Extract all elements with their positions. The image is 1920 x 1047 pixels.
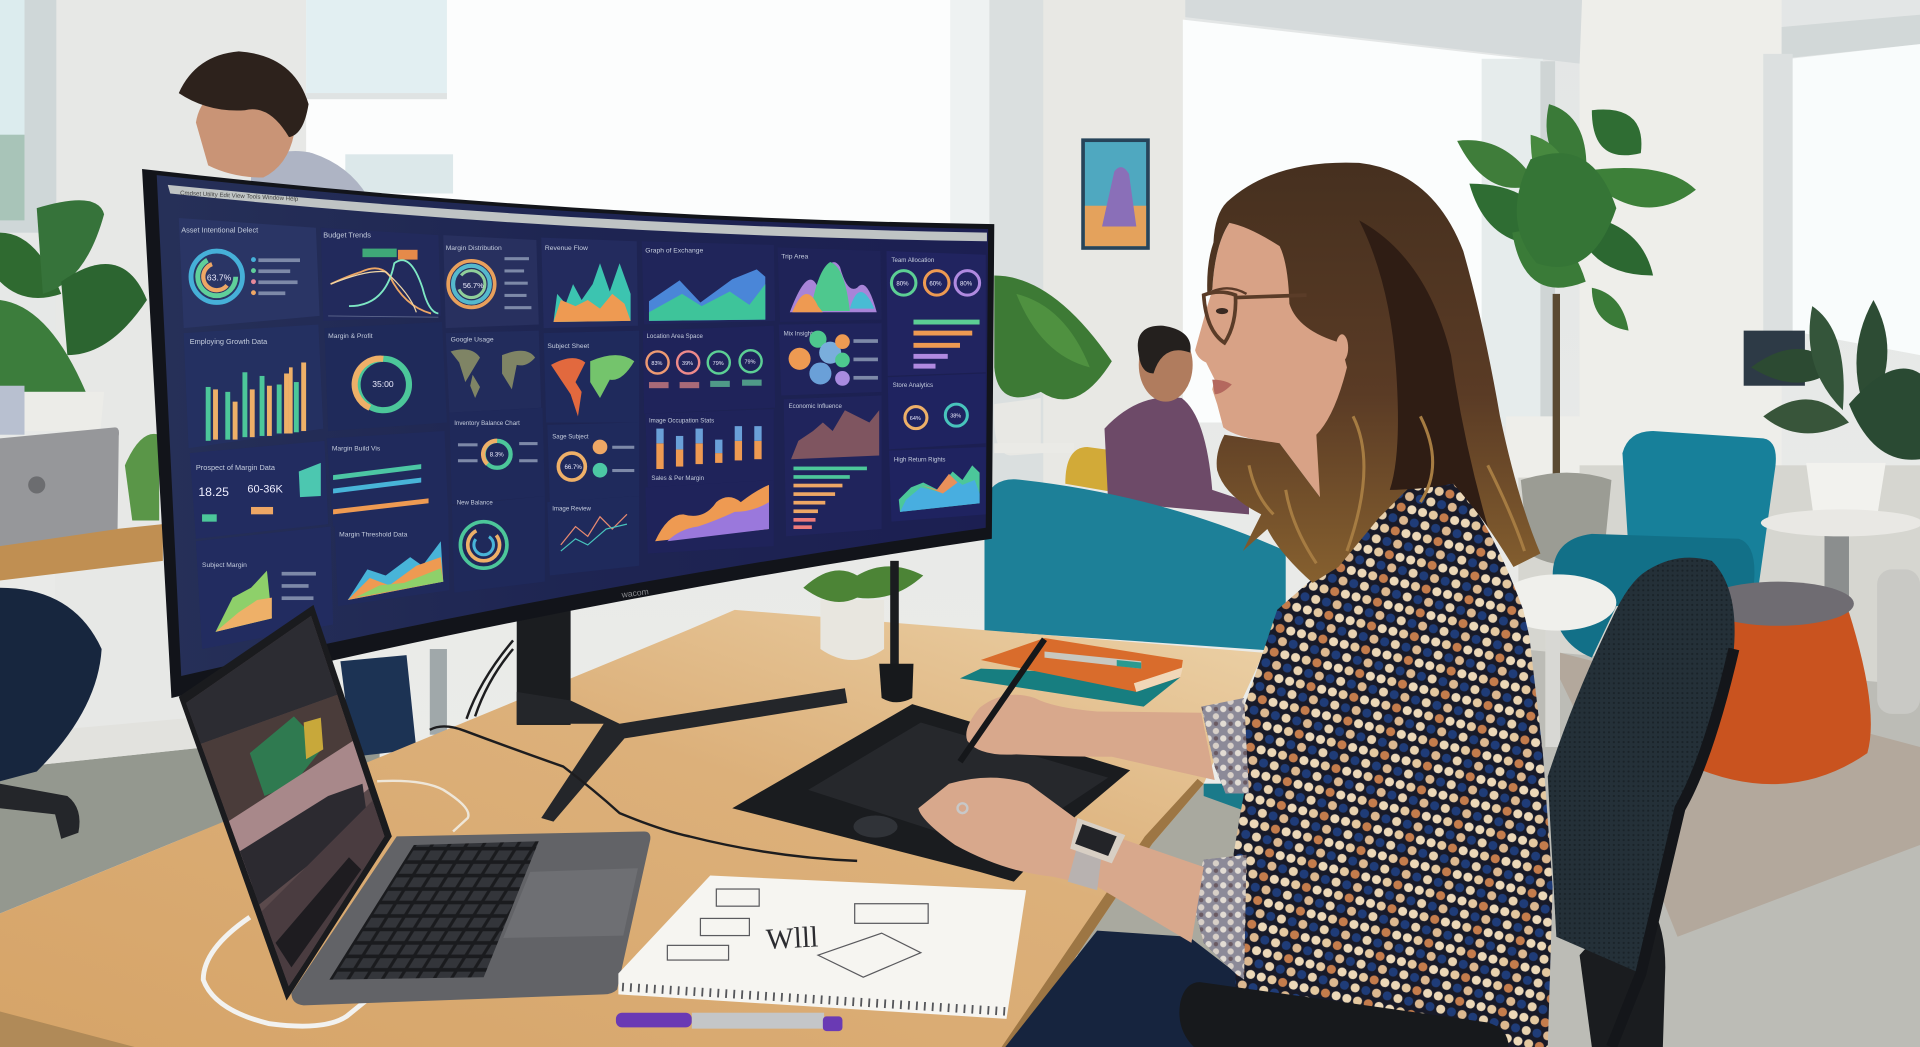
panel: ring distribution: Margin Distribution [446,245,502,252]
colleague head [196,88,294,178]
panel: concentric rings: New Balance [457,500,493,507]
support pole [430,649,447,735]
panel: small line chart: Image Review [552,506,592,513]
panel: rings and progress bars: 80% [896,280,909,287]
panel: four rings: Location Area Space [647,333,704,340]
menu bar: Cmdset Utility Edit View Tools Window Help [180,190,299,203]
ultrawide curved monitor [142,169,994,698]
panel: stat tiles: Prospect of Margin Data [196,463,276,472]
round side table [1761,509,1920,714]
far right window [1763,15,1920,355]
panel: horizontal bars: Margin Build Vis [332,446,381,453]
panel: rings and progress bars [887,251,986,376]
panel: wave area: Sales & Per Margin [651,475,704,482]
ear [1336,334,1348,361]
wall artwork [1081,138,1150,250]
panel: big stats area [196,527,333,649]
panel: donut overview [179,218,320,328]
sketch notebook [618,876,1026,1019]
panel: bar chart: Employing Growth Data [190,337,268,346]
round white coffee table [1499,574,1616,747]
panel: stacked bars: Image Occupation Stats [649,417,714,424]
background desk with laptop [0,386,163,580]
panel: stat tiles: 18.25 [198,485,229,499]
panel: concentric rings [452,496,545,593]
panel: two rings: 64% [910,416,921,422]
chair frame [1580,891,1665,1047]
panel: large donut: Margin & Profit [328,333,373,340]
upper sleeve cuff [1201,698,1249,794]
panel: four rings: 79% [744,360,756,366]
monitor screen [157,175,988,676]
monitor bezel [142,169,994,698]
office chair [1548,558,1735,1047]
lower sleeve cuff [1191,855,1247,980]
panel: small line chart [547,496,639,576]
right window [1183,0,1582,478]
panel: colorful area [889,447,986,522]
panel: stat tiles [190,441,328,539]
monitor brand logo: wacom [620,586,649,600]
colleague legs [340,655,416,757]
panel: blue green area chart: Graph of Exchange [645,247,703,254]
laptop screen [184,610,389,989]
panel: small donut tiles: Inventory Balance Chart [454,420,520,427]
graphics tablet [732,704,1130,882]
panel: brown area plus bars [784,396,882,536]
monitor stand [517,610,847,822]
panel: teal orange area chart [541,238,638,328]
wall side table and laptop in back [1744,331,1849,637]
stylus holder [879,561,913,702]
panel: flower diagram: Mix Insight [784,331,813,338]
plant: dark rubber plant [1751,300,1920,529]
floor and rug [0,649,1920,1047]
panel: brown area plus bars: Economic Influence [789,403,842,410]
colleague torso [251,151,367,196]
wooden desk [0,610,1264,1047]
panel: colorful area: High Return Rights [894,457,946,464]
panel: large donut: 35:00 [372,379,394,389]
colleague hair [179,51,309,137]
panel: ring distribution [443,235,539,328]
panel: two rings: 38% [950,414,961,420]
panel: world map: Google Usage [451,337,494,344]
chair armrest [1179,982,1509,1047]
panel: line chart [321,228,441,321]
seated colleague [1065,326,1249,514]
panel: ring distribution: 56.7% [463,281,484,290]
stacked books [960,638,1183,707]
laptop base [291,831,650,1005]
panel: teal orange area chart: Revenue Flow [545,245,588,252]
forearm and resting hand [918,778,1204,943]
jeans [1005,931,1261,1047]
panel: stat tiles: 60-36K [247,483,284,495]
panel: horizontal bars [327,431,448,527]
panel: small donut tiles: 8.3% [490,452,504,459]
plant pot: grey planter [1521,473,1611,565]
panel: colored world map: Subject Sheet [547,343,589,350]
plant: left [0,200,147,431]
panel: small donut tiles [449,408,545,505]
purple marker [616,1013,842,1031]
panel: big stats area: Subject Margin [202,562,247,569]
panel: small donut and icons: 66.7% [564,464,582,471]
panel: world map [446,331,541,413]
floor under desk right side [1078,784,1261,980]
ring [958,803,967,813]
panel: colored world map [544,331,639,422]
sketch heading: Wlll [765,921,819,956]
plant: small desk plant [803,566,923,660]
panel: two rings [888,373,986,449]
upper arm with stylus hand [966,695,1215,780]
light hair strands [1249,416,1524,563]
seated person legs on left [0,588,102,839]
panel: flower diagram [779,323,882,396]
panel: bump chart: Trip Area [781,253,808,260]
laptop lid [179,605,392,1000]
glasses [1204,292,1307,343]
panel: two rings: Store Analytics [893,382,933,389]
lips [1212,380,1232,394]
standing colleague [179,51,447,757]
menu bar [168,185,987,241]
woman [918,163,1553,1047]
panel: multi area: Margin Threshold Data [339,531,408,538]
central large window [306,0,1043,490]
chair back [1548,558,1735,974]
panel: donut overview: 63.7% [207,272,232,282]
teal armchair [1553,431,1776,658]
panel: large donut [324,322,447,431]
eyebrow and eye [1212,288,1247,314]
panel: four rings [643,326,775,414]
panel: donut overview: Asset Intentional Delect [181,226,258,235]
panel: rings and progress bars: Team Allocation [891,257,934,264]
panel: stacked bars [645,409,774,487]
teal sofa [984,479,1286,651]
panel: blue green area chart [642,241,775,325]
panel: multi area [334,505,449,606]
stylus [960,639,1044,762]
panel: four rings: 83% [651,361,663,367]
plant: large fiddle leaf [1457,104,1696,490]
panel: rings and progress bars: 60% [929,280,942,287]
panel: four rings: 79% [713,361,724,367]
orange ottoman [1687,582,1871,784]
hair [1207,163,1540,583]
plant: mid room [994,276,1112,456]
smart watch [1068,818,1125,890]
chair back edge [1611,649,1734,1047]
trackpad [503,868,638,938]
open laptop [179,605,650,1005]
panel: bump chart [778,247,882,322]
silver laptop [0,427,119,546]
panel: line chart: Budget Trends [323,231,371,240]
panel: bar chart [184,325,323,448]
panel: rings and progress bars: 80% [960,280,973,287]
panel: four rings: 39% [682,361,693,367]
panel: wave area [645,475,774,554]
shirt body [1191,484,1553,1047]
dark hair shadow [1359,220,1488,527]
panel: small donut and icons [547,422,639,502]
panel: small donut and icons: Sage Subject [552,433,589,440]
sketch boxes [716,889,759,906]
charging cables [203,640,857,1026]
keyboard [329,841,539,980]
neck and face [1195,223,1359,497]
left window [0,0,56,233]
